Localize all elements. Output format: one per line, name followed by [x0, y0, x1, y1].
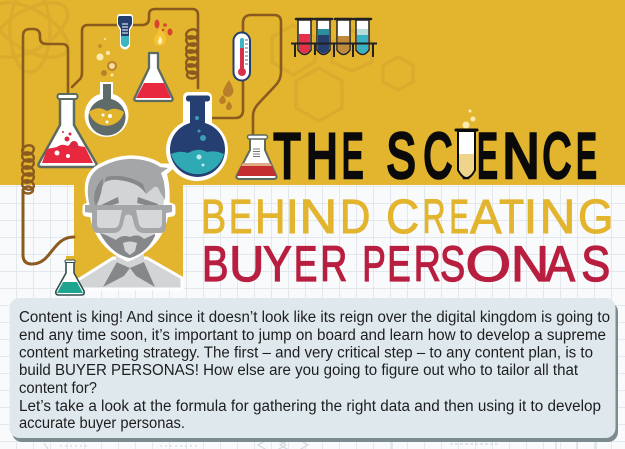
intro text: Content is king! And since it doesn’t look like its reign over the digital kingdom is going to: [19, 309, 610, 326]
heading: behind creating: H: [255, 190, 286, 244]
intro text: content for?: [19, 380, 97, 397]
head outline: [86, 159, 172, 258]
heading: behind creating: G: [578, 190, 614, 244]
heading: buyer personas: R: [320, 236, 347, 292]
heading: behind creating: N: [299, 190, 337, 244]
intro text: Let’s take a look at the formula for gathering the right data and then using it to develop: [19, 398, 601, 415]
title: the science: E: [477, 122, 498, 192]
pipes and tubing: [23, 9, 281, 264]
icon: large blue flask: [166, 92, 228, 181]
title: the science: S: [387, 122, 416, 192]
heading: behind creating: R: [422, 190, 446, 244]
icon: teal flask: [56, 256, 84, 295]
heading: behind creating: E: [229, 190, 252, 244]
title: the science: I: [460, 122, 472, 192]
icon: right flask: [236, 135, 277, 179]
icon: right coil: [185, 28, 199, 79]
icon: test tube rack: [291, 19, 377, 57]
intro text: build BUYER PERSONAS! How else are you going to figure out who to tailor all that: [19, 362, 579, 379]
icon: small red flask: [134, 53, 173, 101]
heading: behind creating: D: [340, 190, 370, 244]
glasses: [85, 205, 172, 233]
heading: buyer personas: B: [202, 236, 228, 292]
title: the science: H: [306, 122, 338, 192]
collar: [103, 260, 155, 287]
heading: behind creating: I: [524, 190, 537, 244]
eyebrows: [101, 197, 158, 208]
intro text: end any time soon, it’s important to jump on board and learn how to develop a supreme: [19, 327, 606, 344]
title: the science: E: [342, 122, 363, 192]
heading: behind creating: N: [540, 190, 576, 244]
heading: behind creating: B: [201, 190, 226, 244]
intro text: content marketing strategy. The first – and very critical step – to any content plan, is to: [19, 344, 593, 362]
icon: round yellow flask: [84, 82, 128, 137]
heading: buyer personas: Y: [263, 236, 292, 292]
icon: left coil: [21, 144, 35, 194]
icon: flame: [154, 20, 172, 46]
heading: behind creating: C: [386, 190, 419, 244]
title: the science: C: [424, 122, 452, 192]
intro panel: [10, 298, 618, 442]
icon: brown drops: [219, 80, 234, 110]
title: the science: C: [542, 122, 571, 192]
heading: buyer personas: P: [362, 236, 386, 292]
beard: [100, 233, 155, 258]
face: [92, 180, 164, 258]
icon: bubbles: [96, 38, 116, 76]
icon: test tube letter I: [456, 110, 477, 178]
heading: buyer personas: A: [545, 236, 576, 292]
icon: thermometer: [234, 32, 250, 80]
title: the science: N: [503, 122, 539, 192]
heading: behind creating: E: [449, 190, 469, 244]
heading: buyer personas: O: [466, 236, 511, 292]
infographic header: E: [576, 122, 597, 192]
heading: buyer personas: E: [294, 236, 317, 292]
heading: behind creating: T: [499, 190, 524, 244]
intro text: accurate buyer personas.: [19, 415, 185, 432]
heading: buyer personas: S: [440, 236, 465, 292]
hair: [88, 159, 168, 207]
heading: buyer personas: U: [229, 236, 264, 292]
icon: dropper tube: [117, 14, 133, 50]
heading: behind creating: I: [286, 190, 299, 244]
heading: buyer personas: R: [414, 236, 441, 292]
icon: red conical flask: [38, 94, 97, 167]
heading: behind creating: A: [470, 190, 502, 244]
intro text: [19, 309, 610, 432]
heading: buyer personas: E: [387, 236, 411, 292]
heading: buyer personas: S: [581, 236, 610, 292]
heading: buyer personas: N: [511, 236, 549, 292]
title: the science: T: [274, 122, 301, 192]
person avatar: [78, 159, 182, 289]
